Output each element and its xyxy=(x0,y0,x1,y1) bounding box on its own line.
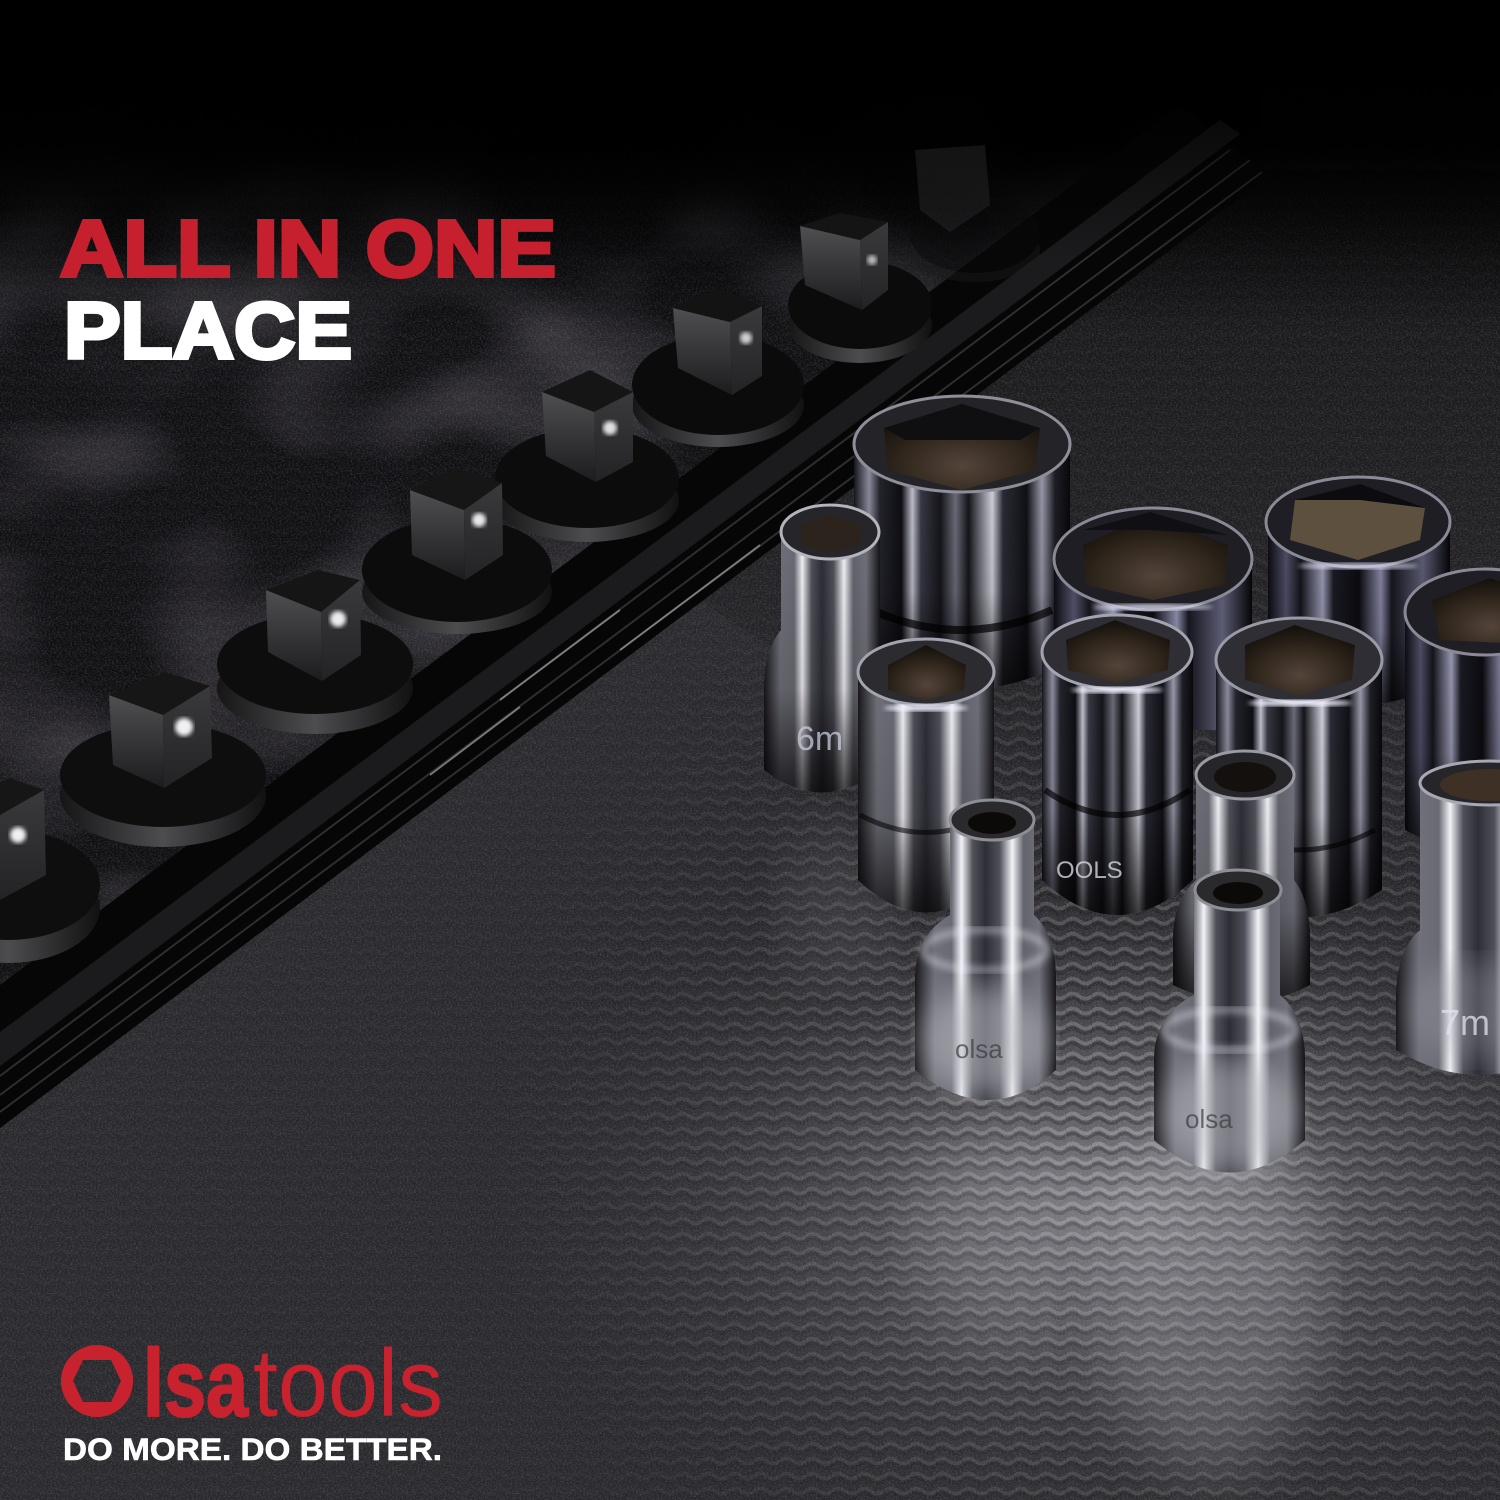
socket marking: 6m xyxy=(796,720,843,758)
socket marking: OOLS xyxy=(1056,857,1123,884)
title line 1: ALL IN ONE xyxy=(60,204,556,293)
black organizer rail xyxy=(0,0,1500,1128)
socket: right front with 7mm xyxy=(1396,761,1500,1075)
row of black adapters on rail xyxy=(0,145,1040,963)
adapter 4 xyxy=(362,467,552,634)
socket marking: olsa xyxy=(1185,1104,1233,1134)
adapter 7 xyxy=(788,213,932,363)
socket: small rear center xyxy=(1173,751,1310,1002)
tagline: DO MORE. DO BETTER. xyxy=(63,1431,442,1467)
title line 2: PLACE xyxy=(64,286,352,375)
adapter 5 xyxy=(495,370,679,542)
socket marking: 7m xyxy=(1440,1002,1490,1043)
socket: small front left xyxy=(915,800,1056,1100)
adapter 3 xyxy=(217,570,413,734)
wordmark bold: lsa xyxy=(143,1330,248,1437)
socket: small 6mm xyxy=(764,505,880,792)
socket: rear right xyxy=(1266,477,1450,705)
socket marking: olsa xyxy=(955,1034,1003,1064)
wordmark light: tools xyxy=(253,1330,443,1437)
socket: rear middle xyxy=(1054,508,1252,730)
title: all in one place xyxy=(60,204,556,375)
adapter 6 xyxy=(632,288,804,447)
socket: large rear xyxy=(854,396,1070,690)
adapter 8 xyxy=(910,145,1040,282)
group of chrome sockets xyxy=(764,396,1500,1173)
icon: hexagon O xyxy=(61,1345,133,1417)
socket: front row middle xyxy=(1042,615,1193,915)
socket: front row right tall xyxy=(1216,618,1382,918)
socket: small front right xyxy=(1154,870,1305,1173)
adapter 1 xyxy=(0,778,100,963)
logo: Olsatools with tagline xyxy=(61,1330,443,1467)
socket: far right xyxy=(1405,569,1500,850)
adapter 2 xyxy=(60,672,266,847)
socket: front row left xyxy=(858,639,994,912)
